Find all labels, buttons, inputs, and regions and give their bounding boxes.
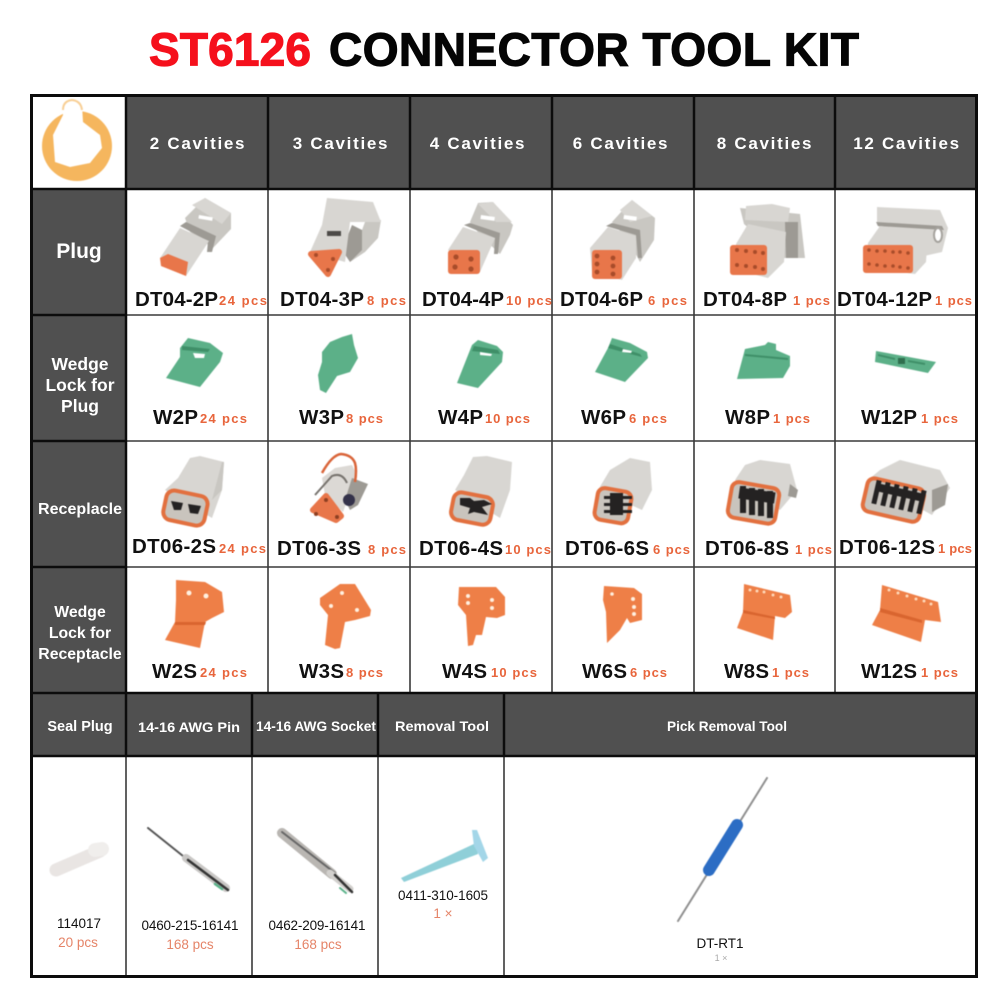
label W8P 1 pcs: W8P [725, 406, 770, 429]
wedge W2P [166, 338, 223, 387]
label DT06-12S 1 pcs: 1 pcs [938, 541, 972, 556]
label DT06-8S 1 pcs: 1 pcs [795, 542, 832, 557]
label W3S 8 pcs: W3S [299, 660, 344, 683]
column headers: 6 Cavities [573, 134, 669, 153]
icon: orange ring logo [42, 100, 112, 181]
label 114017 20 pcs [57, 916, 101, 950]
wedge W12S [872, 585, 941, 642]
label DT04-4P 10 pcs: 10 pcs [506, 293, 552, 308]
wedge W4S [458, 587, 505, 646]
label W2S 24 pcs: W2S [152, 660, 197, 683]
label W3P 8 pcs: W3P [299, 406, 344, 429]
label DT06-4S 10 pcs [419, 537, 551, 560]
label DT04-12P 1 pcs: DT04-12P [837, 288, 932, 311]
label W2P 24 pcs: 24 pcs [200, 411, 247, 426]
label 0460-215-16141 168 pcs: 168 pcs [166, 937, 214, 952]
label 0462-209-16141 168 pcs: 168 pcs [294, 937, 342, 952]
label W4P 10 pcs: W4P [438, 406, 483, 429]
plug DT04-8P [730, 204, 805, 278]
label DT06-6S 6 pcs [565, 537, 690, 560]
wedge W6S [603, 586, 642, 643]
receptacle DT06-3S [313, 454, 368, 520]
label DT04-3P 8 pcs: 8 pcs [367, 293, 406, 308]
label DT04-6P 6 pcs: 6 pcs [648, 293, 687, 308]
label DT06-6S 6 pcs: DT06-6S [565, 537, 649, 560]
label DT04-2P 24 pcs: DT04-2P [135, 288, 218, 311]
plug DT04-12P [863, 207, 948, 274]
wedge W8S [737, 584, 792, 640]
label W4P 10 pcs [438, 406, 530, 429]
row label: Wedge Lock for Plug: Lock for [45, 375, 115, 395]
label DT-RT1 1 x: DT-RT1 [696, 936, 744, 951]
label W6P 6 pcs: W6P [581, 406, 626, 429]
label DT06-6S 6 pcs: 6 pcs [653, 542, 690, 557]
label W2S 24 pcs: 24 pcs [200, 665, 247, 680]
socket contact [282, 832, 352, 893]
label DT04-12P 1 pcs: 1 pcs [935, 293, 972, 308]
label 0462-209-16141 168 pcs: 0462-209-16141 [268, 918, 366, 933]
label 0411-310-1605 1 x [398, 888, 488, 921]
label DT-RT1 1 x: 1 × [715, 953, 727, 963]
title: CONNECTOR TOOL KIT [329, 24, 859, 76]
label W8S 1 pcs: 1 pcs [772, 665, 809, 680]
label W12S 1 pcs [861, 660, 958, 683]
label DT04-8P 1 pcs [703, 288, 830, 311]
label W6S 6 pcs: W6S [582, 660, 627, 683]
row label: Wedge Lock for Receptacle: Wedge [54, 604, 106, 621]
column headers [150, 134, 961, 153]
label W6P 6 pcs: 6 pcs [629, 411, 667, 426]
label 114017 20 pcs: 20 pcs [58, 935, 98, 950]
label 0411-310-1605 1 x: 1 × [433, 906, 453, 921]
label W3S 8 pcs [299, 660, 383, 683]
column headers: 8 Cavities [717, 134, 813, 153]
column headers: 3 Cavities [293, 134, 389, 153]
label DT06-4S 10 pcs: DT06-4S [419, 537, 503, 560]
label DT04-4P 10 pcs: DT04-4P [422, 288, 504, 311]
column headers: 2 Cavities [150, 134, 246, 153]
wedge W3P [318, 334, 358, 393]
label 0460-215-16141 168 pcs [142, 918, 238, 952]
title: ST6126 [149, 24, 311, 76]
column headers: 12 Cavities [853, 134, 961, 153]
label W8P 1 pcs [725, 406, 810, 429]
label DT04-6P 6 pcs [560, 288, 687, 311]
label W3P 8 pcs: 8 pcs [346, 411, 383, 426]
label W6P 6 pcs [581, 406, 667, 429]
label W12P 1 pcs: W12P [861, 406, 917, 429]
wedge W2S [165, 580, 224, 648]
bottom headers: Pick Removal Tool [667, 718, 787, 734]
label W12P 1 pcs [861, 406, 958, 429]
bottom header row background [31, 693, 977, 756]
label DT04-2P 24 pcs [135, 288, 267, 311]
receptacle DT06-4S [450, 456, 512, 526]
receptacle DT06-8S [727, 460, 798, 525]
row label: Wedge Lock for Plug: Wedge [51, 354, 109, 374]
bottom headers: 14-16 AWG Pin [138, 719, 240, 735]
label W2S 24 pcs [152, 660, 247, 683]
label W12P 1 pcs: 1 pcs [921, 411, 958, 426]
plug DT04-6P [590, 200, 655, 280]
header row background [126, 95, 977, 189]
label 0411-310-1605 1 x: 0411-310-1605 [398, 888, 488, 903]
wedge W6P [595, 338, 648, 382]
bottom headers: 14-16 AWG Socket [256, 718, 376, 734]
label DT06-8S 1 pcs: DT06-8S [705, 537, 789, 560]
column headers: 4 Cavities [430, 134, 526, 153]
label 0460-215-16141 168 pcs: 0460-215-16141 [142, 918, 238, 933]
label DT06-3S 8 pcs [277, 537, 406, 560]
label DT06-8S 1 pcs [705, 537, 832, 560]
wedge W4P [457, 340, 503, 388]
label W2P 24 pcs [153, 406, 247, 429]
row label: Plug: Plug [56, 240, 102, 263]
plug DT04-4P [448, 202, 513, 274]
label W12S 1 pcs: 1 pcs [921, 665, 958, 680]
pin contact [148, 828, 228, 890]
label DT06-3S 8 pcs: 8 pcs [368, 542, 406, 557]
label DT06-2S 24 pcs: 24 pcs [219, 541, 266, 556]
label DT06-12S 1 pcs: DT06-12S [839, 536, 935, 559]
label W4P 10 pcs: 10 pcs [485, 411, 530, 426]
label W6S 6 pcs: 6 pcs [630, 665, 667, 680]
label W3P 8 pcs [299, 406, 383, 429]
label DT-RT1 1 x [696, 936, 744, 963]
receptacle DT06-6S [593, 458, 652, 524]
label W12S 1 pcs: W12S [861, 660, 917, 683]
label 114017 20 pcs: 114017 [57, 916, 101, 931]
label 0462-209-16141 168 pcs [268, 918, 366, 952]
bottom headers: Removal Tool [395, 718, 489, 734]
label DT04-3P 8 pcs: DT04-3P [280, 288, 364, 311]
label W4S 10 pcs [442, 660, 537, 683]
label W2P 24 pcs: W2P [153, 406, 198, 429]
label W8S 1 pcs: W8S [724, 660, 769, 683]
label DT04-2P 24 pcs: 24 pcs [219, 293, 267, 308]
wedge W3S [320, 584, 371, 649]
label DT04-8P 1 pcs: DT04-8P [703, 288, 787, 311]
pick removal tool [678, 778, 767, 921]
label DT06-3S 8 pcs: DT06-3S [277, 537, 361, 560]
label W4S 10 pcs: W4S [442, 660, 487, 683]
label W6S 6 pcs [582, 660, 667, 683]
label DT04-6P 6 pcs: DT04-6P [560, 288, 643, 311]
plug DT04-3P [310, 198, 381, 274]
row label: Wedge Lock for Receptacle: Receptacle [38, 646, 122, 663]
label DT04-8P 1 pcs: 1 pcs [793, 293, 830, 308]
bottom headers [47, 718, 787, 735]
removal tool [401, 830, 488, 882]
wedge W12P [875, 351, 936, 373]
label W3S 8 pcs: 8 pcs [346, 665, 383, 680]
label DT06-2S 24 pcs: DT06-2S [132, 535, 216, 558]
label DT06-2S 24 pcs [132, 535, 266, 558]
plug DT04-2P [160, 198, 231, 276]
label W8P 1 pcs: 1 pcs [773, 411, 810, 426]
receptacle DT06-2S [162, 456, 224, 527]
label DT06-4S 10 pcs: 10 pcs [505, 542, 551, 557]
bottom headers: Seal Plug [47, 719, 113, 735]
wedge W8P [737, 342, 790, 379]
receptacle DT06-12S [861, 460, 950, 523]
row label: Receptacle: Receplacle [38, 501, 122, 518]
seal plug [56, 849, 102, 870]
label DT04-4P 10 pcs [422, 288, 552, 311]
row label: Wedge Lock for Receptacle: Lock for [49, 625, 111, 642]
label W8S 1 pcs [724, 660, 809, 683]
label DT04-3P 8 pcs [280, 288, 406, 311]
label W4S 10 pcs: 10 pcs [491, 665, 537, 680]
row label column background [31, 189, 126, 693]
row label: Wedge Lock for Plug: Plug [61, 396, 99, 416]
